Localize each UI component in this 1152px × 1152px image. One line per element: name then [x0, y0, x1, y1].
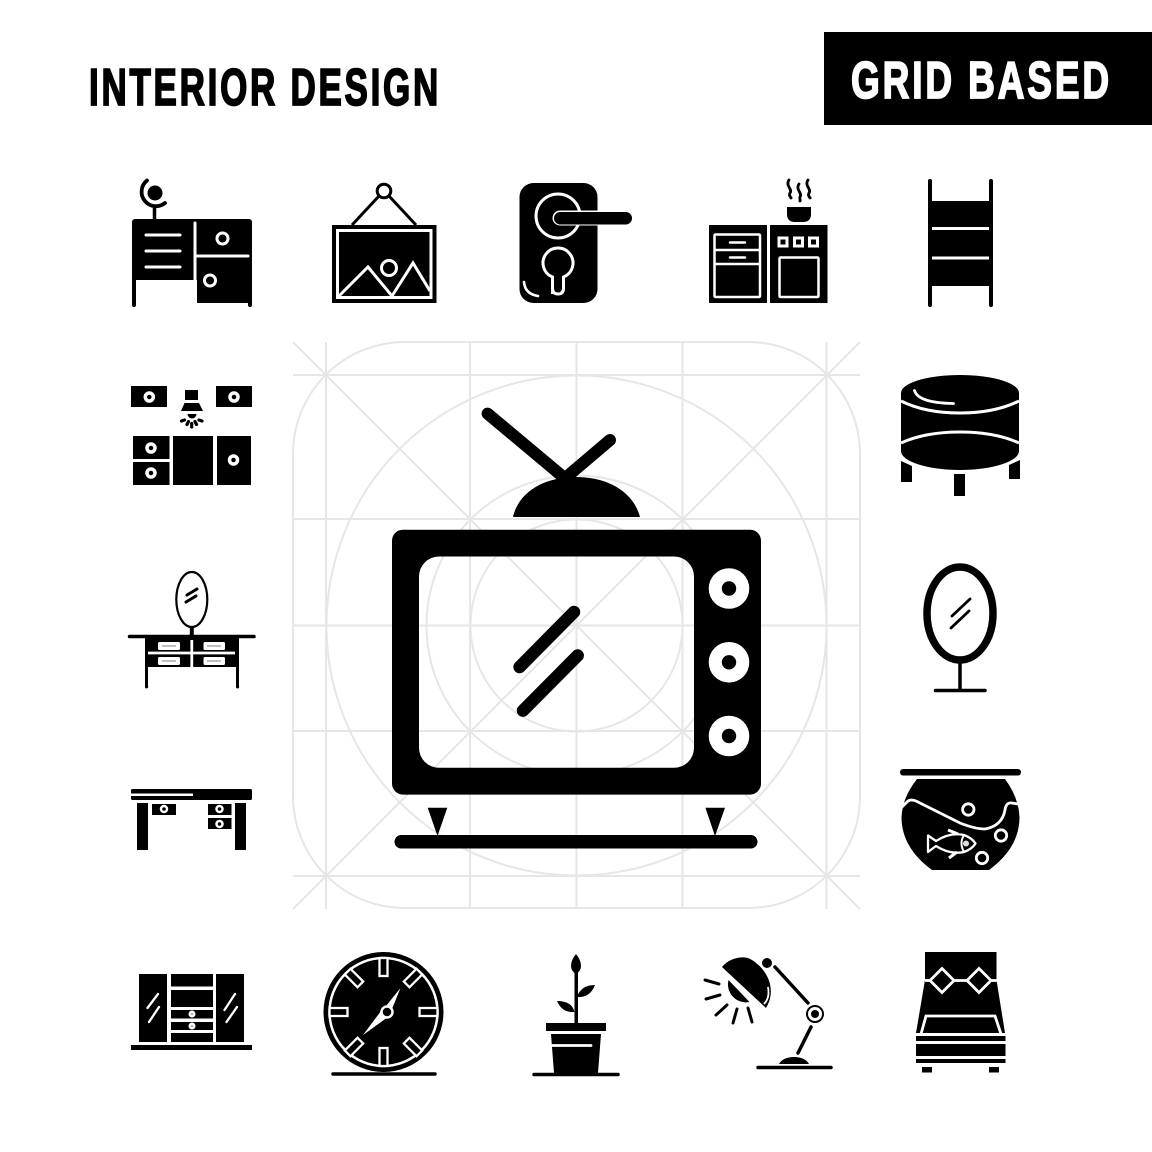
- icon: kitchen counter with stove: [709, 180, 828, 303]
- icon: desk with lamp: [132, 180, 252, 307]
- icon: door handle: [520, 183, 632, 303]
- title: INTERIOR DESIGN: [89, 58, 441, 116]
- icon: fish bowl: [900, 769, 1021, 870]
- tv body with screen: [392, 530, 761, 795]
- icon: retro television: [392, 414, 761, 848]
- icon: writing desk: [131, 789, 252, 850]
- icon: wardrobe: [131, 974, 252, 1050]
- icon: standing oval mirror: [927, 567, 993, 690]
- icon: kitchen with cabinets and hood: [131, 386, 252, 485]
- icon: bed: [916, 952, 1006, 1072]
- icon: wall clock: [324, 952, 444, 1074]
- icon: round stool table: [901, 375, 1020, 496]
- tv antenna: [488, 414, 640, 517]
- icon: hanging picture frame: [332, 184, 436, 303]
- tv stand: [394, 808, 758, 848]
- icon: desk lamp: [705, 957, 831, 1068]
- tv knobs: [709, 568, 749, 756]
- badge: grid based: [824, 32, 1152, 125]
- screen glare: [520, 612, 578, 711]
- construction grid: [293, 342, 860, 909]
- icon: potted plant: [534, 954, 618, 1074]
- icon: ladder shelf: [928, 179, 993, 307]
- icon: vanity table with mirror: [130, 572, 254, 688]
